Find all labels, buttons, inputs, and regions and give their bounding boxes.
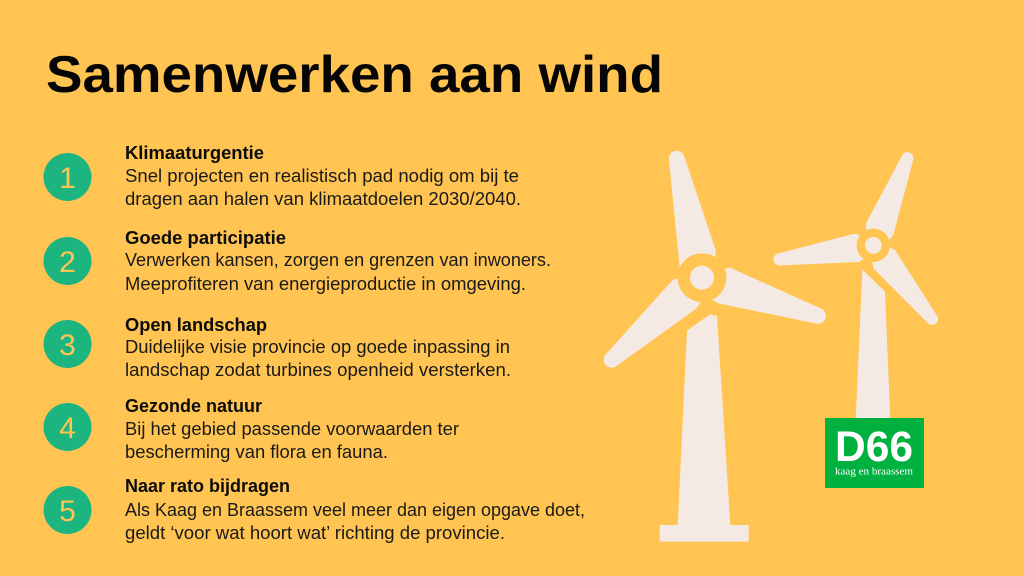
number badge 5 bbox=[44, 486, 92, 534]
text block 1: dragen aan halen van klimaatdoelen 2030/2040. bbox=[125, 188, 521, 209]
title: Samenwerken aan wind bbox=[46, 46, 663, 104]
text block 4 bbox=[125, 396, 459, 462]
text block 1 bbox=[125, 143, 521, 209]
text block 3: landschap zodat turbines openheid versterken. bbox=[125, 359, 511, 380]
number badge 4 bbox=[44, 403, 92, 451]
number badge 5: 5 bbox=[59, 495, 76, 528]
text block 4: Gezonde natuur bbox=[125, 396, 262, 416]
number badge 3: 3 bbox=[59, 329, 76, 362]
item 2: Goede participatie bbox=[44, 228, 551, 294]
number badge 4: 4 bbox=[59, 412, 76, 445]
text block 1: Snel projecten en realistisch pad nodig om bij te bbox=[125, 165, 519, 186]
item 4: Gezonde natuur bbox=[44, 396, 459, 462]
text block 2: Verwerken kansen, zorgen en grenzen van inwoners. bbox=[125, 249, 551, 270]
text block 2 bbox=[125, 228, 551, 294]
text block 5: Naar rato bijdragen bbox=[125, 476, 290, 496]
logo: D66 kaag en braassem: D66 bbox=[835, 424, 913, 471]
number badge 2 bbox=[44, 237, 92, 285]
text block 4: bescherming van flora en fauna. bbox=[125, 441, 388, 462]
text block 5: Als Kaag en Braassem veel meer dan eigen opgave doet, bbox=[125, 499, 585, 520]
text block 2: Meeprofiteren van energieproductie in omgeving. bbox=[125, 273, 526, 294]
item 3: Open landschap bbox=[44, 315, 511, 380]
number badge 1: 1 bbox=[59, 162, 76, 195]
number badge 3 bbox=[44, 320, 92, 368]
text block 3 bbox=[125, 315, 511, 380]
item 5: Naar rato bijdragen bbox=[44, 476, 585, 543]
item 1: Klimaaturgentie bbox=[44, 143, 521, 209]
logo: D66 kaag en braassem: kaag en braassem bbox=[835, 466, 913, 478]
text block 3: Duidelijke visie provincie op goede inpassing in bbox=[125, 336, 510, 357]
number badge 2: 2 bbox=[59, 246, 76, 279]
text block 1: Klimaaturgentie bbox=[125, 143, 264, 163]
text block 4: Bij het gebied passende voorwaarden ter bbox=[125, 418, 459, 439]
text block 5 bbox=[125, 476, 585, 543]
icon: small wind turbine bbox=[773, 152, 938, 420]
text block 2: Goede participatie bbox=[125, 228, 286, 248]
icon: large wind turbine bbox=[604, 151, 826, 542]
number badge 1 bbox=[44, 153, 92, 201]
text block 3: Open landschap bbox=[125, 315, 267, 335]
text block 5: geldt ‘voor wat hoort wat’ richting de provincie. bbox=[125, 522, 505, 543]
logo: D66 kaag en braassem bbox=[825, 418, 924, 488]
